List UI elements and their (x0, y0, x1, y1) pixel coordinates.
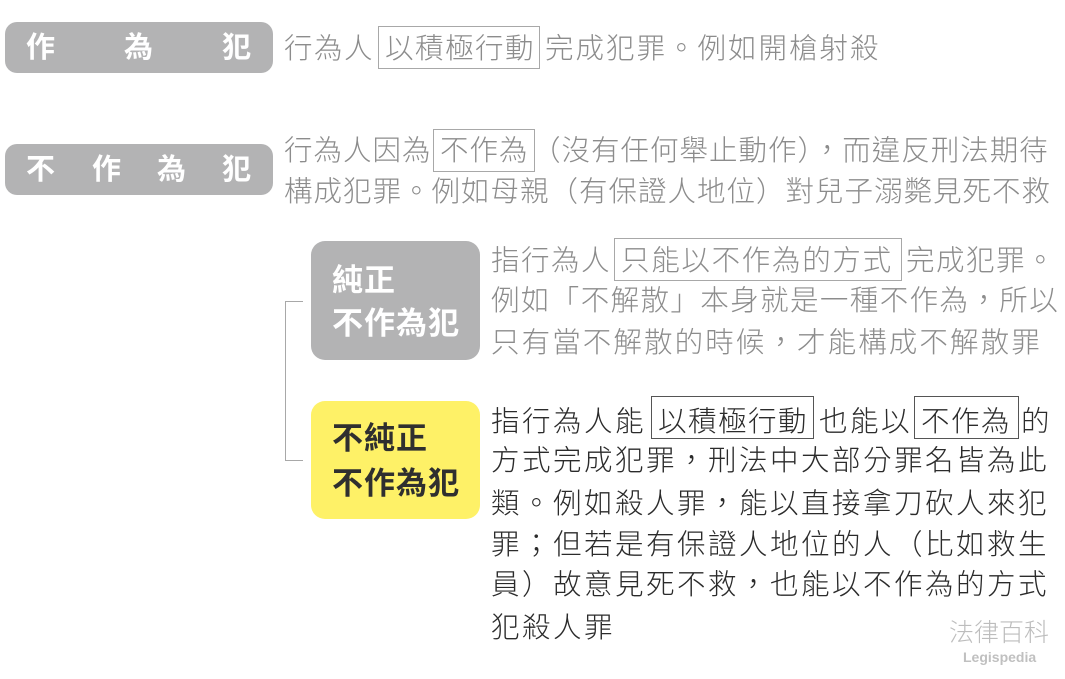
pill: 不作為犯: 為 (157, 154, 186, 186)
card: 純正不作為犯 (311, 241, 480, 360)
text block: 不純正不作為犯 definition: 方式完成犯罪，刑法中大部分罪名皆為此 (491, 445, 1049, 477)
pill: 作為犯 (5, 22, 273, 73)
text block: 不作為犯 definition: 不作為 (440, 135, 529, 167)
text block: 純正不作為犯 definition: 只有當不解散的時候，才能構成不解散罪 (491, 327, 1042, 359)
card: 純正不作為犯: 不作為犯 (332, 306, 460, 341)
text block: 不純正不作為犯 definition: 指行為人能 (491, 406, 646, 438)
card: 純正不作為犯: 純正 (332, 263, 396, 298)
pill: 不作為犯: 作 (92, 154, 121, 186)
text block: 不純正不作為犯 definition: 不作為 (921, 406, 1011, 438)
card: 不純正不作為犯: 不純正 (332, 421, 428, 456)
text block: 不純正不作為犯 definition: 犯殺人罪 (491, 612, 615, 644)
text block: 純正不作為犯 definition: 例如「不解散」本身就是一種不作為，所以 (491, 285, 1059, 317)
text block: 不作為犯 definition: 行為人因為 (284, 135, 432, 167)
text block: 作為犯 definition (284, 26, 881, 69)
pill: 不作為犯 (5, 144, 273, 195)
text block: 作為犯 definition: 以積極行動 (385, 33, 535, 65)
text block: 不純正不作為犯 definition: 以積極行動 (658, 406, 808, 438)
text block: 不作為犯 definition: 構成犯罪。例如母親（有保證人地位）對兒子溺斃見死不救 (284, 176, 1051, 208)
text block: 不純正不作為犯 definition: 也能以 (819, 406, 912, 438)
logo: 法律百科 Legispedia: 法律百科 (949, 619, 1049, 647)
pill: 作為犯: 作 (26, 32, 55, 64)
text block: 作為犯 definition: 完成犯罪。例如開槍射殺 (545, 33, 881, 65)
text block: 作為犯 definition: 行為人 (284, 33, 374, 65)
logo: 法律百科 Legispedia: Legispedia (963, 649, 1036, 665)
text block: 不純正不作為犯 definition: 類。例如殺人罪，能以直接拿刀砍人來犯 (491, 488, 1049, 520)
text block: 純正不作為犯 definition: 指行為人 (491, 245, 611, 277)
pill: 不作為犯: 不 (26, 154, 55, 186)
text block: 純正不作為犯 definition: 只能以不作為的方式 (621, 245, 893, 277)
pill: 不作為犯: 犯 (222, 154, 251, 186)
pill: 作為犯: 犯 (222, 32, 251, 64)
text block: 純正不作為犯 definition (491, 238, 1059, 359)
connector bracket (285, 301, 303, 461)
text block: 不純正不作為犯 definition: 員）故意見死不救，也能以不作為的方式 (491, 569, 1049, 601)
text block: 不純正不作為犯 definition (491, 396, 1051, 644)
card: 不純正不作為犯 (311, 401, 480, 519)
text block: 不作為犯 definition: （沒有任何舉止動作），而違反刑法期待 (532, 135, 1049, 167)
text block: 不純正不作為犯 definition: 罪；但若是有保證人地位的人（比如救生 (491, 529, 1049, 561)
card: 不純正不作為犯: 不作為犯 (332, 466, 460, 501)
logo: 法律百科 Legispedia (949, 619, 1049, 665)
text block: 純正不作為犯 definition: 完成犯罪。 (906, 245, 1056, 277)
text block: 不純正不作為犯 definition: 的 (1021, 406, 1051, 438)
pill: 作為犯: 為 (124, 32, 153, 64)
text block: 不作為犯 definition (284, 129, 1051, 208)
